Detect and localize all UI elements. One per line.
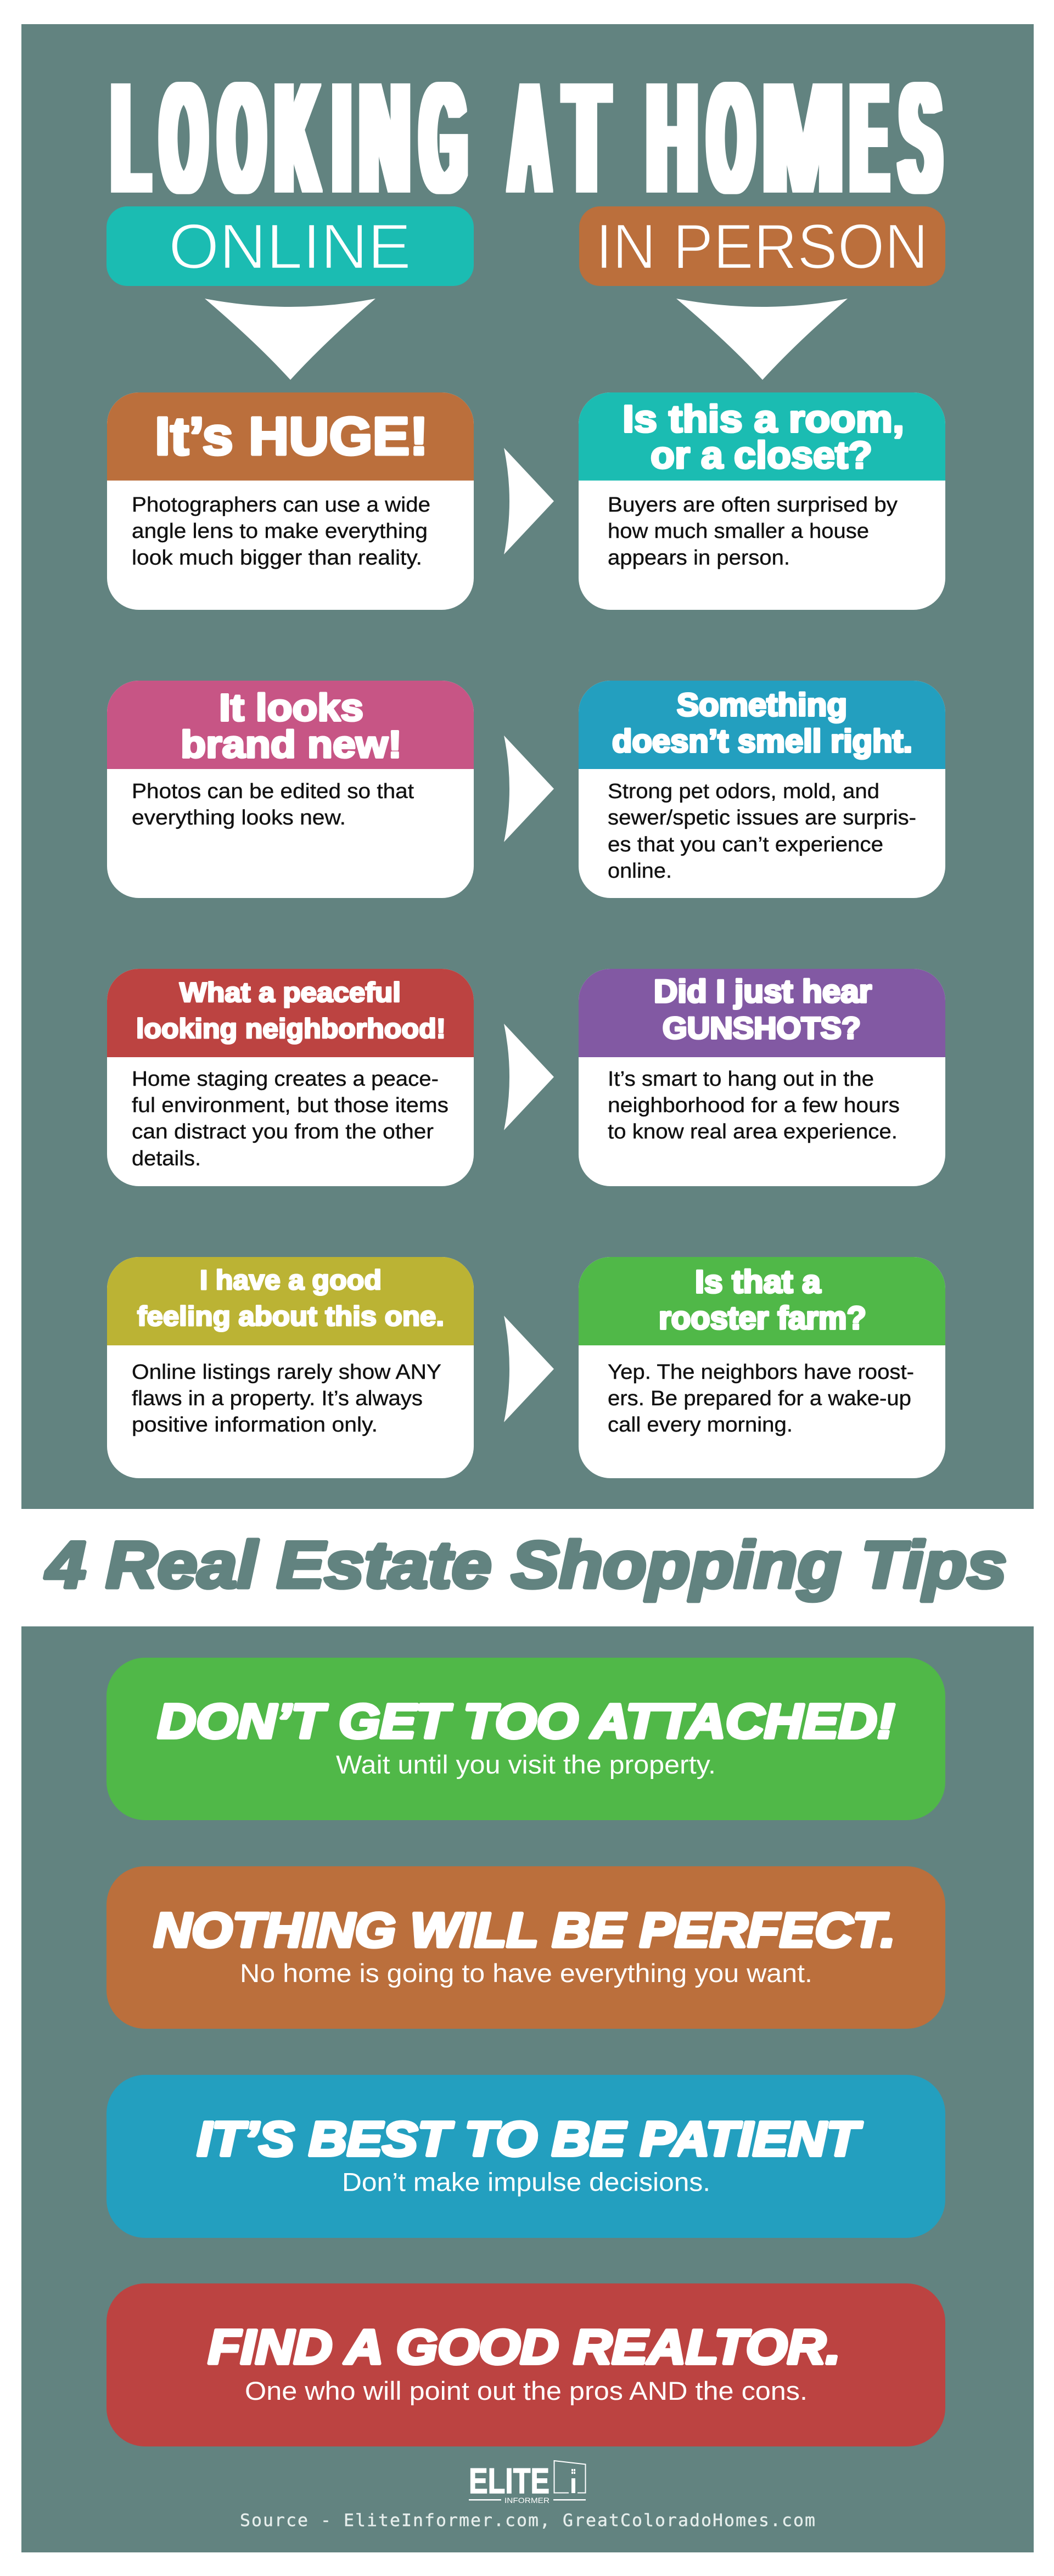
card: gunshots: GUNSHOTS? <box>663 1011 861 1045</box>
card: room or closet: or a closet? <box>651 434 872 476</box>
tip: attached <box>106 1658 945 1820</box>
card: smell <box>579 681 945 898</box>
card: peaceful neighborhood: What a peaceful <box>180 977 401 1008</box>
title: O <box>220 52 264 225</box>
card: peaceful neighborhood: looking neighborhood! <box>136 1013 446 1044</box>
card: rooster farm: ers. Be prepared for a wake-up <box>608 1387 911 1410</box>
tip: attached: Wait until you visit the property. <box>336 1750 716 1779</box>
title: I <box>334 52 350 225</box>
card: It's HUGE: Photographers can use a wide <box>132 493 430 517</box>
card: It's HUGE: It’s HUGE! <box>155 406 428 466</box>
card: smell: online. <box>608 860 672 883</box>
card: gunshots: It’s smart to hang out in the <box>608 1068 874 1091</box>
heading: shopping tips: 4 Real Estate Shopping Tips <box>45 1528 1007 1602</box>
card: good feeling <box>107 1257 474 1478</box>
source line: Source - EliteInformer.com, GreatColoradoHomes.com <box>240 2511 815 2530</box>
tip: realtor <box>106 2283 945 2446</box>
card: It's HUGE: angle lens to make everything <box>132 520 428 543</box>
card: peaceful neighborhood: Home staging creates a peace- <box>132 1068 439 1091</box>
card: brand new <box>107 681 474 898</box>
arrow: row 2 <box>504 736 554 842</box>
card: smell: doesn’t smell right. <box>612 723 912 759</box>
card: smell: Something <box>677 687 847 723</box>
tip: realtor: One who will point out the pros AND the cons. <box>245 2376 808 2405</box>
card: room or closet: appears in person. <box>608 547 790 570</box>
arrow: row 4 <box>504 1316 554 1422</box>
label: online: ONLINE <box>169 211 411 282</box>
card: rooster farm: Is that a <box>695 1264 821 1300</box>
title: O <box>708 52 753 225</box>
card: peaceful neighborhood: details. <box>132 1147 201 1170</box>
card: rooster farm: call every morning. <box>608 1413 793 1436</box>
card: brand new: It looks <box>219 686 363 729</box>
title: G <box>421 52 466 225</box>
card: peaceful neighborhood <box>107 969 474 1186</box>
title: T <box>565 52 609 225</box>
label: in person: IN PERSON <box>596 211 928 282</box>
card: smell: sewer/spetic issues are surpris- <box>608 806 916 829</box>
label: online <box>106 206 474 286</box>
card: gunshots <box>579 969 945 1186</box>
title: N <box>360 52 410 225</box>
card: It's HUGE: look much bigger than reality. <box>132 547 422 570</box>
title: E <box>851 52 887 225</box>
title: S <box>900 52 940 225</box>
card: gunshots: neighborhood for a few hours <box>608 1094 900 1117</box>
logo: Elite Informer: ELITE <box>469 2461 550 2501</box>
panel: comparison background <box>21 24 1034 1509</box>
card: good feeling: Online listings rarely show ANY <box>132 1361 441 1384</box>
tip: realtor: FIND A GOOD REALTOR. <box>208 2320 840 2374</box>
tip: perfect: No home is going to have everything you want. <box>240 1958 812 1988</box>
card: peaceful neighborhood: can distract you from the other <box>132 1120 434 1143</box>
arrow: online down <box>205 299 375 380</box>
card: gunshots: Did I just hear <box>654 974 872 1009</box>
arrow: in person down <box>676 299 848 380</box>
card: rooster farm: rooster farm? <box>659 1300 866 1336</box>
title: K <box>276 52 318 225</box>
card: room or closet: how much smaller a house <box>608 520 869 543</box>
tip: attached: DON’T GET TOO ATTACHED! <box>158 1694 895 1748</box>
title: A <box>510 52 549 225</box>
title: L <box>113 52 149 225</box>
logo: Elite Informer: INFORMER <box>504 2496 550 2505</box>
title <box>111 52 944 225</box>
tip: patient: Don’t make impulse decisions. <box>342 2167 710 2197</box>
card: room or closet: Is this a room, <box>623 397 904 440</box>
card: good feeling: flaws in a property. It’s always <box>132 1387 423 1410</box>
card: good feeling: positive information only. <box>132 1413 378 1436</box>
arrow: row 3 <box>504 1024 554 1130</box>
card: It's HUGE <box>107 392 474 610</box>
tip: perfect: NOTHING WILL BE PERFECT. <box>154 1902 895 1957</box>
card: brand new: brand new! <box>181 723 402 766</box>
card: rooster farm: Yep. The neighbors have roost- <box>608 1361 914 1384</box>
card: brand new: Photos can be edited so that <box>132 780 414 803</box>
tip: perfect <box>106 1866 945 2029</box>
card: gunshots: to know real area experience. <box>608 1120 898 1143</box>
card: room or closet: Buyers are often surprised by <box>608 493 898 517</box>
tip: patient <box>106 2075 945 2238</box>
panel: tips background <box>21 1626 1034 2552</box>
card: room or closet <box>579 392 945 610</box>
tip: patient: IT’S BEST TO BE PATIENT <box>197 2112 862 2166</box>
card: smell: Strong pet odors, mold, and <box>608 780 879 803</box>
card: good feeling: I have a good <box>200 1265 382 1295</box>
title: M <box>763 52 843 225</box>
card: good feeling: feeling about this one. <box>137 1301 444 1332</box>
title: O <box>161 52 206 225</box>
card: smell: es that you can’t experience <box>608 833 883 856</box>
card: brand new: everything looks new. <box>132 806 346 829</box>
card: rooster farm <box>579 1257 945 1478</box>
arrow: row 1 <box>504 448 554 554</box>
card: peaceful neighborhood: ful environment, but those items <box>132 1094 448 1117</box>
title: H <box>647 52 697 225</box>
